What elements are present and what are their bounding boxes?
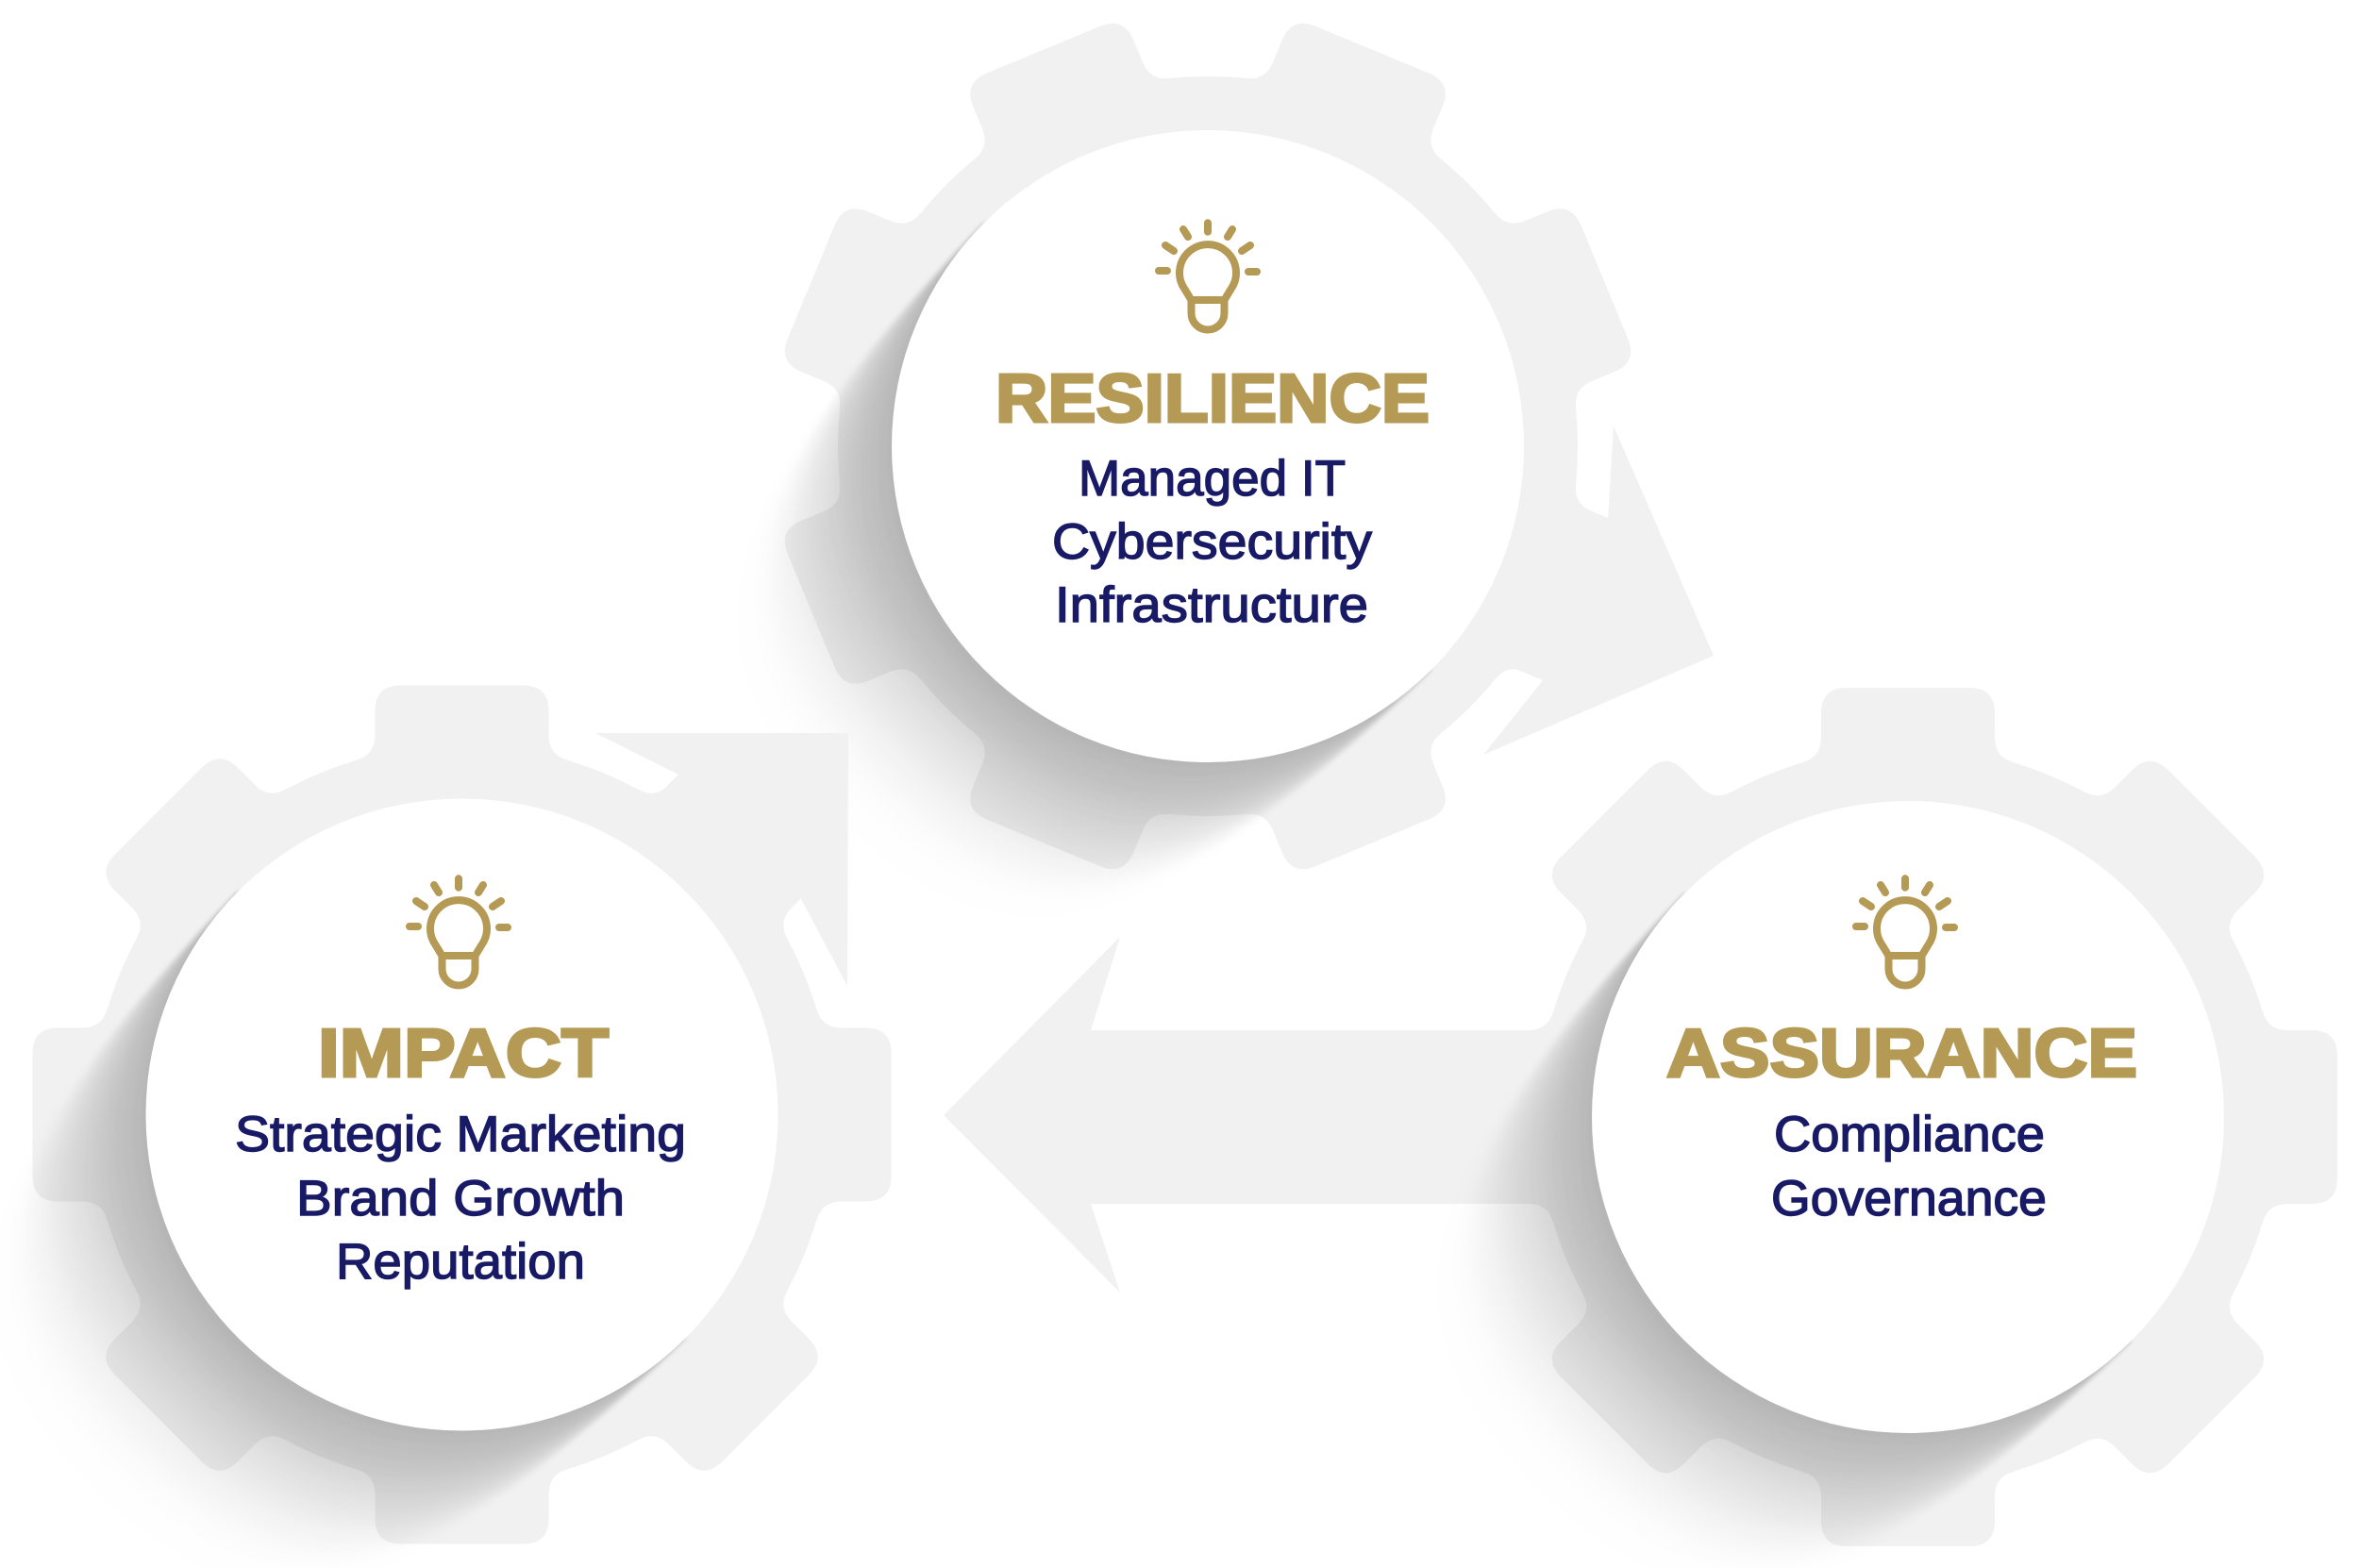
panel: Impact gear xyxy=(0,685,892,1568)
arrow: Assurance gear to Impact xyxy=(944,937,1604,1293)
text: Assurance services: Governance xyxy=(1771,1171,2047,1226)
arrow: Impact gear to Resilience xyxy=(537,733,848,1039)
text: Resilience services: Managed IT xyxy=(1079,451,1346,507)
icon: Impact light bulb xyxy=(410,878,508,985)
shadow: Resilience circle xyxy=(778,222,1432,876)
arrow: Resilience gear to Assurance xyxy=(1412,426,1714,755)
text: Assurance services: Compliance xyxy=(1774,1107,2045,1162)
heading: Resilience: RESILIENCE xyxy=(995,361,1430,437)
gear: Assurance xyxy=(1479,688,2337,1546)
shadow: Assurance circle xyxy=(1480,892,2133,1546)
text: Impact services xyxy=(235,1107,686,1290)
gear: Resilience xyxy=(647,0,1768,1007)
shadow: Impact circle xyxy=(32,891,687,1543)
text: Impact services: Brand Growth xyxy=(296,1171,625,1226)
heading: Impact: IMPACT xyxy=(318,1016,609,1092)
gear: Impact xyxy=(32,685,892,1543)
panel: Resilience gear xyxy=(778,24,1714,876)
icon: Assurance light bulb xyxy=(1856,878,1954,985)
heading: Assurance: ASSURANCE xyxy=(1666,1016,2137,1092)
icon: Resilience light bulb xyxy=(1159,223,1257,330)
panel: Assurance gear xyxy=(944,688,2337,1568)
text: Resilience services: Infrastructure xyxy=(1055,577,1368,633)
text: Resilience services xyxy=(1052,451,1373,633)
text: Assurance services xyxy=(1771,1107,2047,1226)
circle: Impact xyxy=(145,798,778,1430)
text: Impact services: Reputation xyxy=(336,1234,585,1290)
circle: Resilience xyxy=(892,130,1524,762)
text: Resilience services: Cybersecurity xyxy=(1052,514,1373,570)
circle: Assurance xyxy=(1592,801,2224,1433)
text: Impact services: Strategic Marketing xyxy=(235,1107,686,1162)
